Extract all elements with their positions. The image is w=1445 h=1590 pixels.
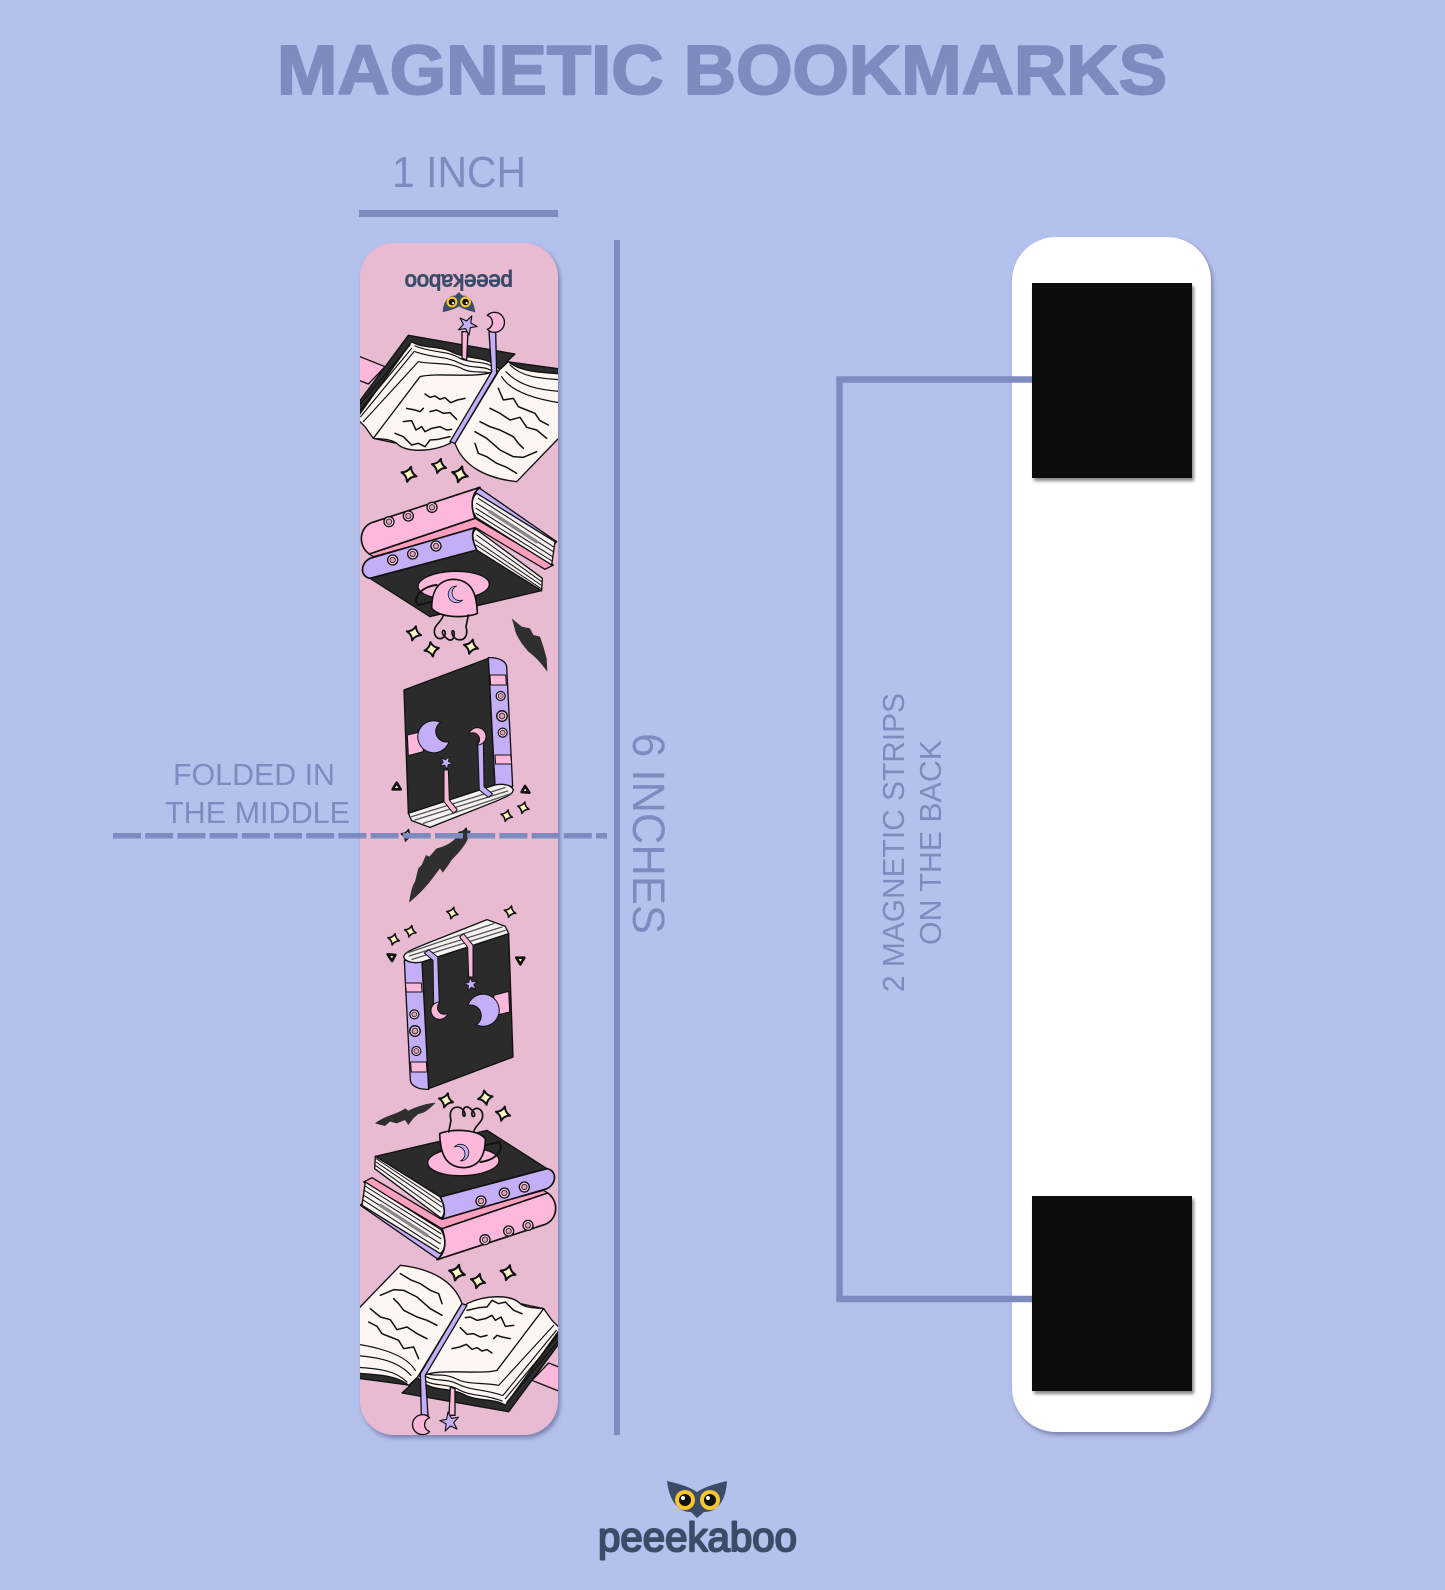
- bookmark base: [360, 243, 558, 1435]
- panel: bookmark back: [840, 237, 1211, 1432]
- magnet connector bracket: [840, 380, 1032, 1299]
- open book: [357, 312, 563, 482]
- small upside-down logo: peeekaboo: [405, 269, 513, 294]
- label: 6 inches: 6 INCHES: [623, 733, 674, 934]
- fold dashed line: [113, 833, 607, 838]
- label: folded in the middle: FOLDED IN: [173, 757, 335, 792]
- bookmark illustrations: [354, 269, 563, 1435]
- label: 2 magnetic strips on the back: ON THE BACK: [913, 740, 948, 945]
- magnetic strip bottom: [1032, 1196, 1192, 1391]
- rotated lower half of artwork: [354, 904, 560, 1435]
- label: 2 magnetic strips on the back: 2 MAGNETIC STRIPS: [876, 693, 911, 992]
- height measure line: [614, 240, 620, 1435]
- label: folded in the middle: THE MIDDLE: [165, 795, 350, 830]
- label: 2 magnetic strips on the back: [876, 693, 948, 992]
- bat on the fold: [409, 831, 471, 903]
- magnetic strip top: [1032, 283, 1192, 478]
- stacked books with cup: [361, 487, 557, 640]
- title: MAGNETIC BOOKMARKS: [277, 31, 1167, 109]
- small upside-down logo: [405, 269, 513, 312]
- panel: bookmark front: [354, 243, 563, 1435]
- sparkles: [400, 457, 480, 658]
- icon: owl: [667, 1481, 727, 1518]
- logo wordmark: peeekaboo: [598, 1514, 797, 1560]
- label: folded in the middle: [165, 757, 350, 830]
- label: 1 inch: 1 INCH: [392, 148, 526, 197]
- logo: peeekaboo: [598, 1481, 797, 1560]
- white bookmark back: [1012, 237, 1211, 1432]
- upper bat: [512, 618, 547, 672]
- closed spell book and sparkles: [393, 658, 531, 843]
- width measure line: [359, 210, 558, 217]
- lower bat: [375, 1103, 436, 1126]
